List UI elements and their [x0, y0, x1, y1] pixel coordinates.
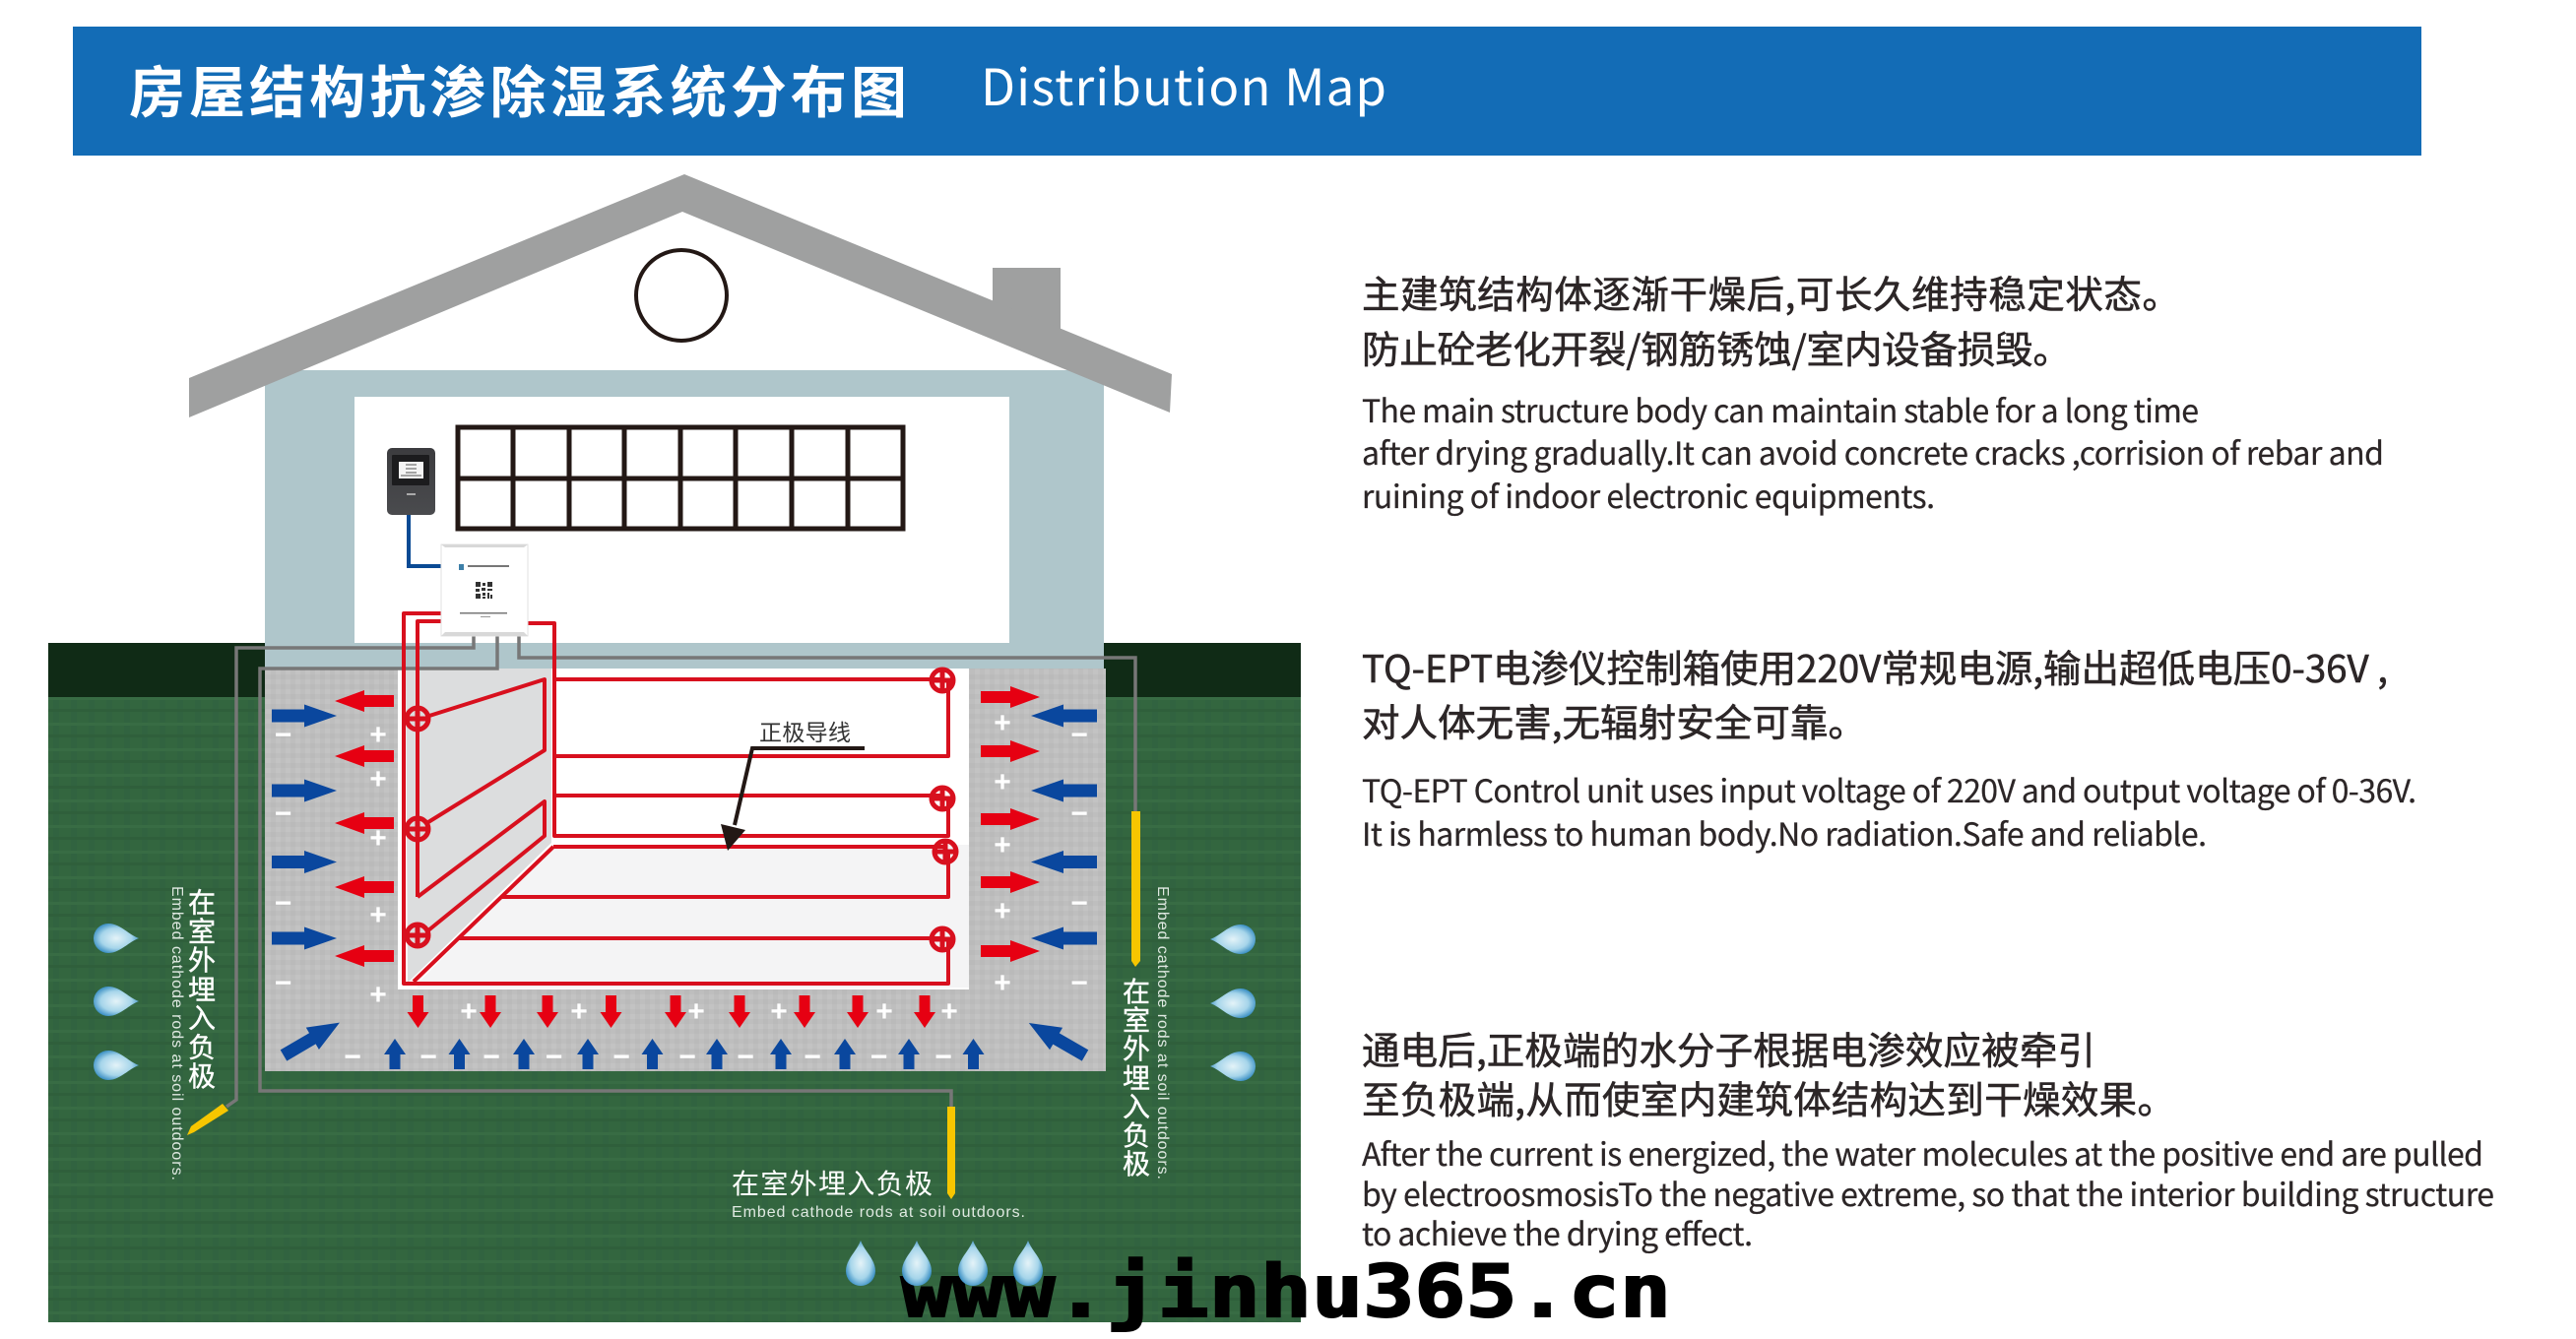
negative signs: −	[275, 797, 291, 830]
negative signs: −	[737, 1041, 754, 1073]
water drops: bottom	[846, 1241, 1043, 1286]
left wall	[406, 669, 551, 983]
text block: electroosmosis effect: 至负极端,从而使室内建筑体结构达到干燥效果。	[1362, 1070, 2175, 1125]
anode connectors	[407, 670, 956, 950]
positive signs: +	[369, 979, 387, 1011]
red arrows: right side	[981, 686, 1040, 962]
positive signs: +	[770, 995, 788, 1028]
blue diagonal arrows: corners	[277, 1011, 1091, 1066]
negative signs: −	[483, 1041, 500, 1073]
structure frame	[398, 669, 969, 989]
chimney	[993, 268, 1061, 335]
text block: low voltage safety: TQ-EPT电渗仪控制箱使用220V常规电源,输出超低电压0-36V ,	[1362, 639, 2388, 694]
label: right cathode rods: 在室外埋入负极	[1123, 977, 1150, 1180]
wire from control box to back wall	[528, 623, 948, 836]
positive signs: +	[994, 829, 1011, 861]
negative signs: −	[1070, 887, 1088, 920]
roof	[189, 174, 1172, 417]
negative signs	[275, 719, 1088, 1073]
text block: low voltage safety: 对人体无害,无辐射安全可靠。	[1362, 693, 1866, 748]
grid window	[458, 427, 903, 529]
negative signs: −	[1070, 719, 1088, 751]
house wall	[265, 370, 1104, 669]
positive signs: +	[687, 995, 705, 1028]
positive signs: +	[875, 995, 893, 1028]
blue arrows: bottom	[384, 1039, 985, 1069]
negative signs: −	[275, 719, 291, 751]
yellow cathode rods	[187, 811, 1140, 1199]
red anode wires	[404, 613, 948, 984]
label: left cathode rods: Embed cathode rods at soil outdoors.	[168, 886, 185, 1180]
callout: anode wire label: 正极导线	[759, 720, 851, 745]
title: English heading: Distribution Map	[981, 47, 1386, 120]
house	[189, 174, 1172, 669]
negative signs: −	[419, 1041, 437, 1073]
water drops: right	[1210, 925, 1256, 1081]
negative signs: −	[934, 1041, 952, 1073]
positive signs: +	[369, 763, 387, 796]
negative signs: −	[870, 1041, 887, 1073]
text block: long-term stability: 防止砼老化开裂/钢筋锈蚀/室内设备损毁。	[1362, 320, 2071, 375]
text block: low voltage safety: TQ-EPT Control unit uses input voltage of 220V and output voltage of 0-36V.	[1362, 767, 2416, 812]
callout: anode wire label	[721, 720, 865, 851]
negative signs: −	[804, 1041, 821, 1073]
text block: long-term stability: after drying gradually.It can avoid concrete cracks ,corrision of rebar and	[1362, 429, 2384, 475]
wires from control box to left wall	[404, 613, 948, 984]
text block: long-term stability: ruining of indoor electronic equipments.	[1362, 473, 1935, 518]
label: bottom cathode rods	[732, 1169, 1025, 1221]
ground: soil background	[48, 643, 1301, 1322]
water drops: left	[94, 924, 139, 1080]
text block: electroosmosis effect: 通电后,正极端的水分子根据电渗效应被牵引	[1362, 1021, 2095, 1076]
title banner	[73, 27, 2421, 156]
text block: electroosmosis effect: by electroosmosisTo the negative extreme, so that the interior building structure	[1362, 1171, 2494, 1216]
negative signs: −	[275, 887, 291, 920]
text block: long-term stability: 主建筑结构体逐渐干燥后,可长久维持稳定状态。	[1362, 265, 2180, 320]
label: bottom cathode rods: Embed cathode rods at soil outdoors.	[732, 1204, 1025, 1221]
control panel device	[387, 448, 435, 515]
negative signs: −	[612, 1041, 630, 1073]
back wall loops	[459, 679, 948, 938]
blue arrows: right side	[1031, 705, 1097, 949]
negative signs: −	[1070, 967, 1088, 999]
positive signs: +	[994, 895, 1011, 927]
underground soil block	[265, 669, 1106, 1071]
left wall loops	[418, 679, 545, 930]
negative signs: −	[275, 967, 291, 999]
QR code	[476, 582, 492, 599]
text block: electroosmosis effect	[1362, 1021, 2494, 1255]
label: left cathode rods	[168, 886, 216, 1180]
text block: low voltage safety	[1362, 639, 2416, 856]
positive signs: +	[994, 707, 1011, 739]
positive signs: +	[994, 967, 1011, 999]
label: bottom cathode rods: 在室外埋入负极	[732, 1169, 933, 1199]
positive signs: +	[369, 899, 387, 931]
positive signs: +	[369, 822, 387, 855]
text block: long-term stability: The main structure body can maintain stable for a long time	[1362, 387, 2199, 432]
interior white room	[354, 397, 1009, 643]
positive signs: +	[369, 719, 387, 751]
text block: electroosmosis effect: to achieve the drying effect.	[1362, 1210, 1753, 1255]
control box	[441, 544, 528, 636]
text block: long-term stability	[1362, 265, 2384, 518]
positive signs: +	[940, 995, 958, 1028]
positive signs: +	[570, 995, 588, 1028]
negative signs: −	[344, 1041, 361, 1073]
label: right cathode rods	[1123, 886, 1171, 1180]
negative signs: −	[678, 1041, 696, 1073]
positive signs: +	[460, 995, 478, 1028]
watermark url: www.jinhu365.cn	[901, 1250, 1671, 1334]
red arrows: left side	[335, 690, 394, 967]
title: Chinese heading: 房屋结构抗渗除湿系统分布图	[129, 48, 907, 129]
round attic window	[636, 250, 727, 341]
floor	[418, 845, 969, 988]
label: right cathode rods: Embed cathode rods at soil outdoors.	[1154, 886, 1171, 1180]
text block: low voltage safety: It is harmless to human body.No radiation.Safe and reliable.	[1362, 810, 2207, 856]
negative signs: −	[546, 1041, 562, 1073]
positive signs: +	[994, 766, 1011, 798]
floor diagonal	[414, 847, 553, 982]
red arrows: bottom	[408, 995, 935, 1028]
label: left cathode rods: 在室外埋入负极	[188, 888, 216, 1092]
blue signal wire	[409, 515, 441, 566]
grey cathode wires	[226, 636, 1135, 1107]
text block: electroosmosis effect: After the current is energized, the water molecules at the positive end are pulled	[1362, 1130, 2483, 1176]
positive signs	[369, 707, 1011, 1028]
negative signs: −	[1070, 797, 1088, 830]
blue arrows: left side	[272, 705, 337, 949]
